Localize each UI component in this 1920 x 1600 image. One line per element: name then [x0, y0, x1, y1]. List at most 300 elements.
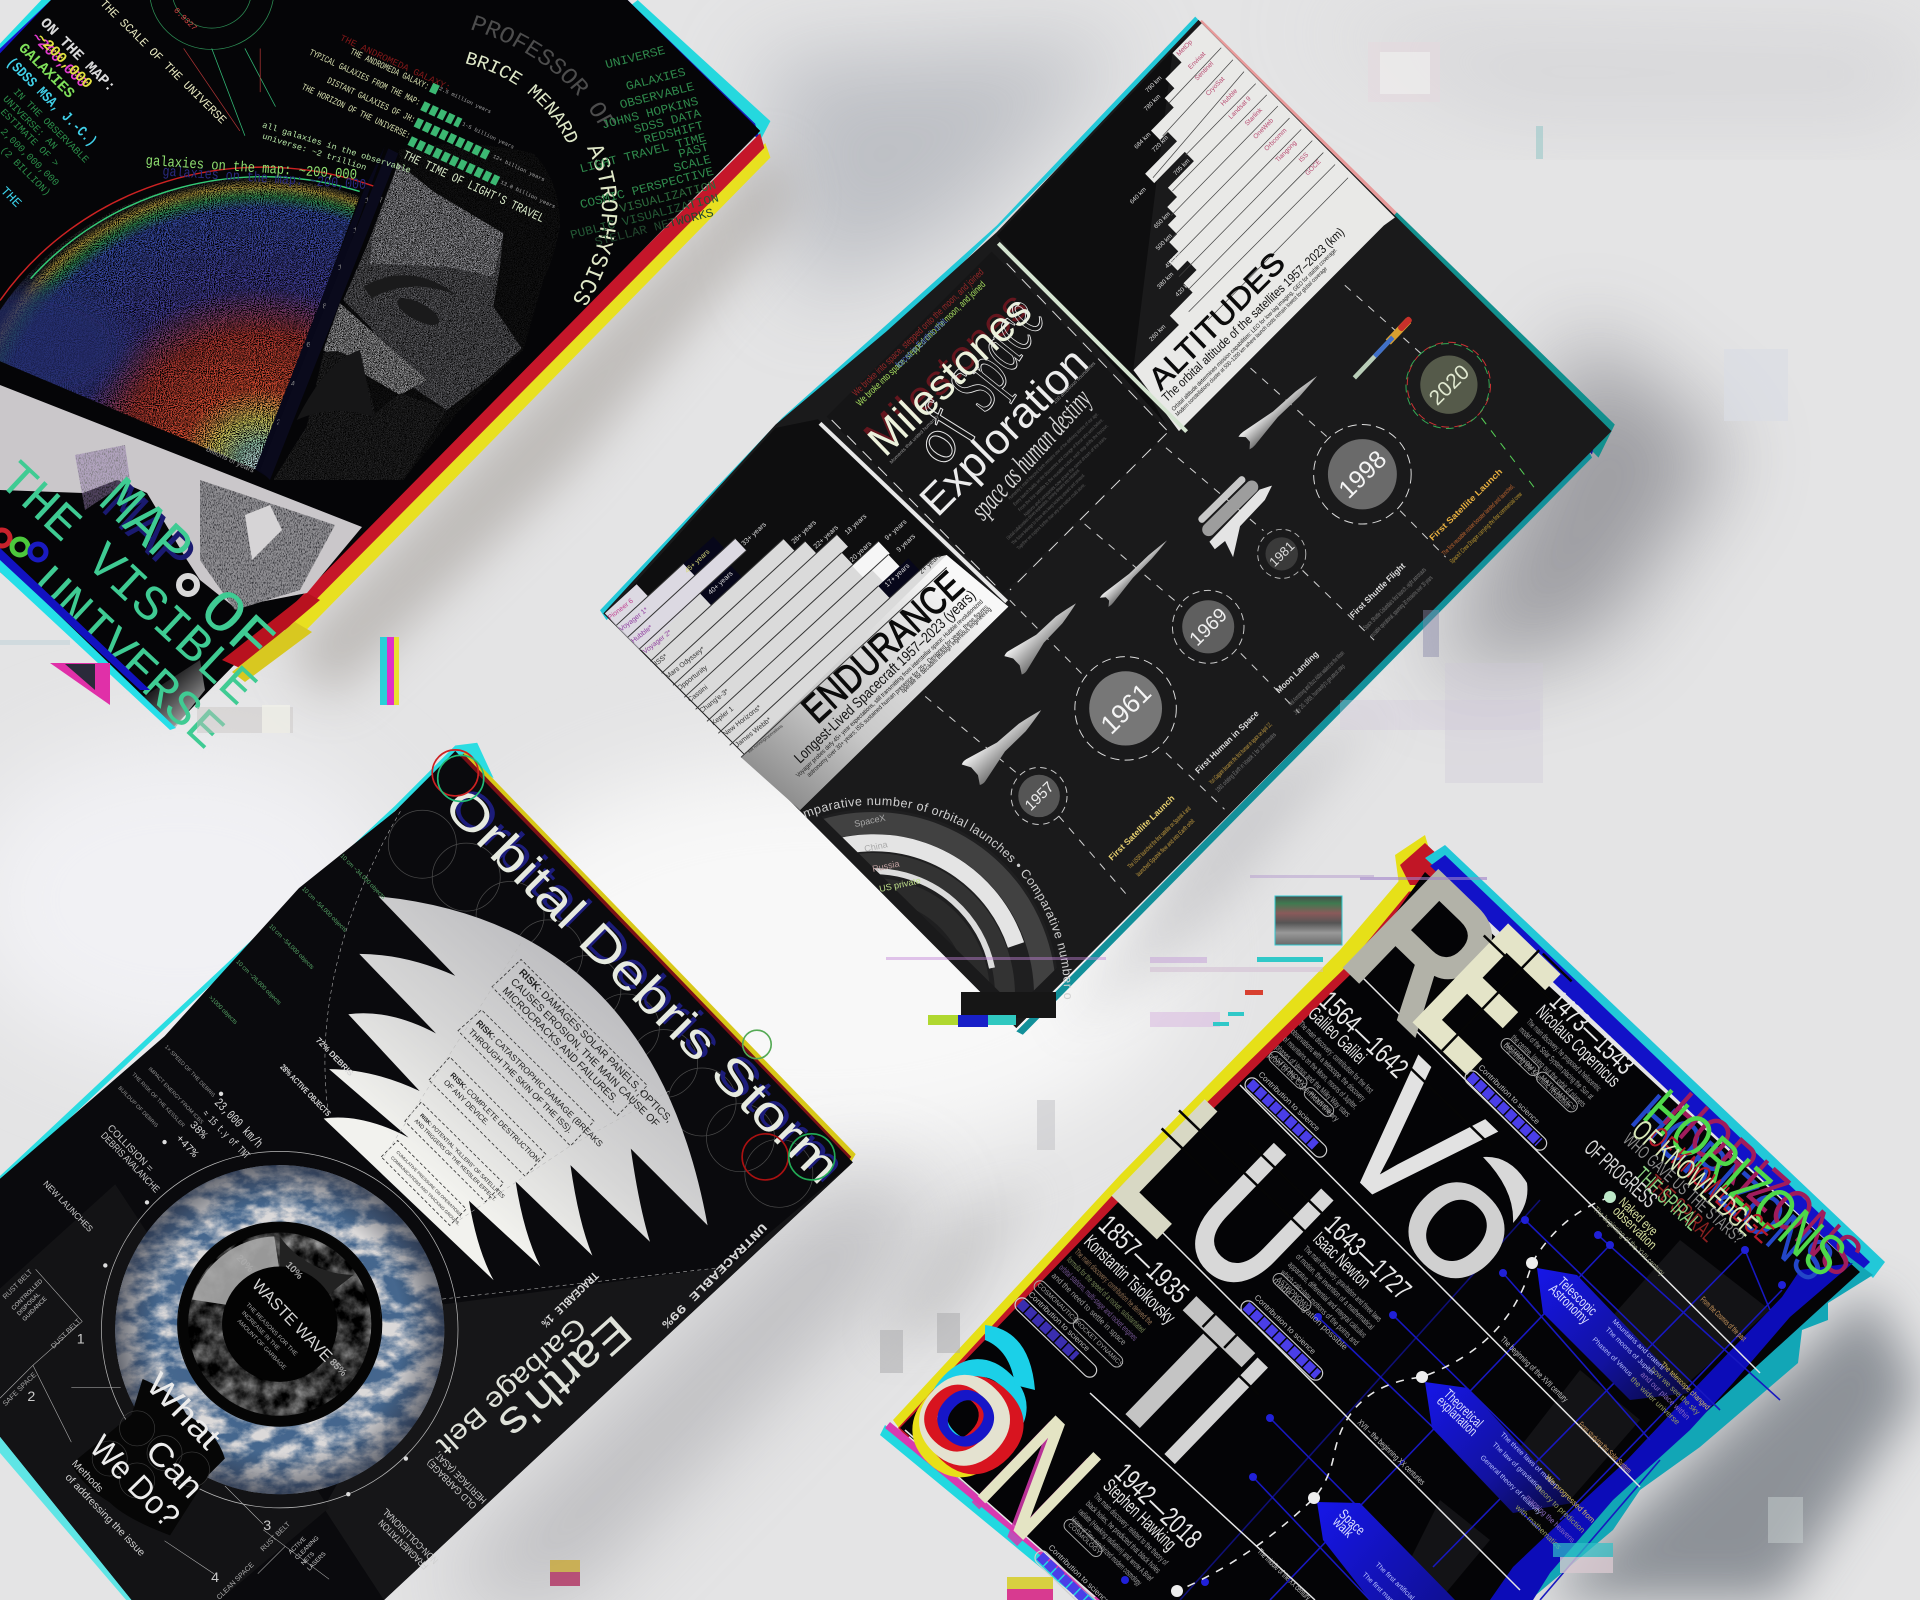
galileo bio: phases of Venus and the Milky Way stars — [1274, 1042, 1353, 1119]
milestones body: From the first satellite to the reusable rocket, each step shifts the horizon. — [1017, 423, 1110, 513]
naked eye observation: Naked eye — [1616, 1194, 1661, 1239]
galaxies on the map label: galaxies on the map: ~200,000 — [145, 154, 357, 184]
panel fill — [827, 252, 1168, 593]
strategy grid lines — [0, 1269, 329, 1579]
source labels: NON-COLLISIONAL — [380, 1505, 441, 1566]
blue stage labels — [1329, 1274, 1601, 1541]
copernicus bio: model of the Solar System placing the Sun at — [1517, 1025, 1596, 1101]
portrait: nose — [323, 303, 427, 395]
left data block: ~200,000 — [32, 31, 95, 92]
milestone bodies: launched Sputnik flew and into Earth orbit — [1135, 818, 1196, 878]
methods caption: Methods — [69, 1458, 105, 1495]
endurance year labels: 22+ years — [813, 524, 840, 550]
stage details: General theory of relativity — [1479, 1454, 1543, 1517]
title: the map of the visible universe: UNIVERSE — [19, 557, 233, 762]
waste wave percentages — [234, 1253, 349, 1379]
new launches heading: NEW LAUNCHES — [41, 1179, 95, 1234]
milestones intro — [850, 267, 988, 409]
milestones panel — [820, 243, 1187, 602]
dark label cells — [683, 537, 920, 605]
right keyword list: SCALE — [672, 153, 713, 176]
numbered strategies: 4 — [211, 1570, 219, 1586]
endurance row labels: Voyager 2* — [642, 629, 673, 656]
milestone captions: Moon Landing — [1274, 649, 1320, 695]
galaxy map: 2 — [277, 420, 281, 428]
endurance panel — [605, 513, 1008, 810]
bottom corner fade — [143, 660, 205, 728]
endurance row labels: Mars Odyssey* — [665, 646, 706, 681]
altitudes title: ALTITUDES — [1143, 246, 1292, 396]
strategy text: NETS — [300, 1551, 316, 1567]
endurance row labels: Kepler 1 — [710, 706, 735, 727]
debris share labels — [278, 1036, 355, 1118]
right keyword list: LIGHT TRAVEL TIME — [578, 131, 708, 176]
milestone captions — [1106, 466, 1504, 862]
milestones side notes: 100 ambitious boundaries — [1052, 360, 1097, 405]
poster body — [603, 20, 1612, 1028]
endurance year labels — [684, 513, 943, 596]
endurance row labels: Voyager 1* — [618, 606, 650, 633]
galaxies on the map label: galaxies on the map: ~200,000 — [162, 165, 367, 194]
light travel rows: TYPICAL GALAXIES FROM THE MAP: — [307, 47, 422, 108]
poster: Revolution / Horizons of Knowledge — [871, 831, 1885, 1600]
scale of the universe heading: THE SCALE OF THE UNIVERSE — [97, 0, 229, 127]
right side detail text: The telescope changed — [1659, 1360, 1712, 1412]
professor arc text: BRICE MENARD — [466, 52, 578, 142]
what can we do block: What — [139, 1365, 229, 1456]
glitch purple scratches — [75, 445, 130, 510]
risk box 5 — [381, 1140, 466, 1226]
poster body — [0, 751, 853, 1600]
source labels: FRAGMENTATION — [377, 1517, 431, 1571]
galaxy map: 4 — [291, 381, 296, 389]
milestones title: Exploration — [910, 338, 1098, 525]
source labels: OLD GARBAGE) — [425, 1456, 479, 1511]
strategy text: GUIDANCE — [22, 1296, 49, 1323]
right side detail text: mapping the heavens — [1524, 1493, 1577, 1545]
strategy text: CLEANING — [294, 1535, 321, 1561]
portrait: face — [343, 163, 522, 410]
risk box 2: RISK: CATASTROPHIC DAMAGE (BREAKS — [474, 1018, 605, 1149]
risk box 1: MICROCRACKS AND FAILURES. — [500, 986, 620, 1105]
strategy text: CONTROLLED — [11, 1278, 45, 1312]
galaxy map: 13.7 — [365, 198, 383, 206]
numbered strategies: 2 — [27, 1389, 35, 1405]
rainbow letter O: O — [871, 1338, 1052, 1519]
lower edge yellow chunk — [232, 622, 312, 682]
rocket 1998 — [1238, 369, 1323, 450]
bar years: 12+ billion years — [491, 153, 546, 183]
year 1957 — [1011, 767, 1067, 824]
giant letter U: U — [1146, 1110, 1366, 1332]
year 1998 — [1314, 425, 1411, 524]
tag labels: COSMOLOGY — [1066, 1522, 1102, 1557]
milestone bodies: The USSR launched the first satellite on Sputnik 4 and — [1127, 805, 1192, 870]
rainbow letter O: O — [881, 1337, 1047, 1505]
newton bio — [1271, 1243, 1384, 1356]
collision heading — [98, 1123, 162, 1196]
waste wave ring — [176, 1220, 384, 1428]
poster corner glitch — [50, 663, 110, 705]
naked eye observation — [1610, 1194, 1661, 1252]
milestones intro: We broke into space, stepped onto the moon, and joined — [850, 267, 986, 399]
endurance year labels: 45+ years — [684, 548, 712, 575]
endurance row labels: James Webb* — [734, 717, 773, 749]
title: the map of the visible universe: MAP — [84, 467, 204, 585]
rocket 1961 — [1004, 593, 1085, 675]
collision stats — [173, 1095, 266, 1162]
bar years — [438, 85, 557, 210]
galileo bio: of mountains on the Moon, moons of Jupiter, — [1281, 1034, 1360, 1111]
rocket 2020 — [1352, 316, 1413, 380]
milestone bodies: Yuri Gagarin became the first human in space on April 12, — [1208, 721, 1274, 786]
giant letter I: I — [1130, 1323, 1302, 1499]
timeline dots — [1171, 1191, 1616, 1597]
giant letter E: E — [1376, 887, 1596, 1110]
contribution labels — [1027, 1063, 1542, 1600]
collision stats: +47% — [173, 1133, 200, 1161]
chromatic edge offsets — [600, 17, 1615, 1035]
endurance year labels: 40+ years — [707, 570, 735, 596]
rocket 1969 — [1099, 535, 1172, 607]
tsiolkovsky bio: and the need to settle in space — [1050, 1270, 1129, 1347]
milestone bodies: SpaceX Crew Dragon carrying the first commercial crew — [1449, 491, 1524, 565]
light travel rows: DISTANT GALAXIES OF JH: — [325, 75, 417, 125]
title ring — [179, 576, 197, 594]
arc chart labels: Russia — [871, 858, 900, 874]
giant letter N: N — [943, 1391, 1125, 1576]
observable universe note: universe: ~2 trillion — [261, 132, 368, 173]
right side detail text: From the Cosmos of the past — [1699, 1295, 1748, 1343]
poster: Orbital Debris Storm — [0, 743, 856, 1600]
milestones body: Every launch builds on the discoveries and courage of those who went before. — [1012, 417, 1105, 507]
traceable labels: UNTRACEABLE 99% — [658, 1220, 769, 1331]
rust belt labels: DUST BELT — [50, 1317, 83, 1350]
contribution labels: Contribution to science — [1477, 1063, 1542, 1126]
year 2020 — [1406, 342, 1491, 428]
rainbow letter O: O — [887, 1318, 1068, 1499]
collision stats: 23,000 km/h — [211, 1095, 266, 1151]
endurance row labels: Opportunity — [676, 664, 709, 692]
orbit value: 0.9327 — [171, 7, 198, 33]
milestones side notes: Moments that united humanity — [889, 414, 941, 465]
portrait dates and names: Konstantin Tsiolkovsky — [1080, 1231, 1179, 1329]
observable universe note: all galaxies in the observable — [261, 121, 412, 175]
milestones intro: We broke into space, stepped onto the moon, and joined — [854, 279, 988, 409]
year 1969 — [1172, 590, 1244, 663]
giant letter L: L — [1076, 1063, 1282, 1272]
earth outer ring — [101, 1151, 458, 1508]
galaxy map — [0, 145, 385, 477]
chromatic edge offsets — [880, 835, 1885, 1600]
altitudes km labels: 640 km — [1129, 186, 1148, 206]
newton bio: which calculate motions of the points and — [1278, 1267, 1361, 1348]
horizons title: HORIZONS — [1619, 1082, 1847, 1295]
galileo bio: The main discovery: contribution for the first — [1297, 1019, 1376, 1096]
endurance row labels — [607, 598, 784, 756]
galileo bio: proof of the Copernican theory — [1266, 1050, 1342, 1124]
what can we do block: Can — [139, 1432, 211, 1505]
altitudes km labels: 500 km — [1155, 233, 1174, 252]
endurance year labels: 2+ years — [918, 552, 943, 576]
left data block: (SDSS MSA, J.-C.) — [2, 56, 99, 150]
contribution progress pills — [1012, 1068, 1550, 1600]
milestones body: Nations and companies now share the same dream of the stars. — [1023, 435, 1109, 518]
altitudes km labels: 380 km — [1156, 271, 1175, 291]
debris dome — [324, 896, 708, 1280]
title: the map of the visible universe: MAP — [87, 474, 207, 592]
time of light heading: THE TIME OF LIGHT'S TRAVEL — [400, 148, 547, 226]
title: the map of the visible universe: OF — [184, 577, 286, 679]
waste wave percentages: 20% — [234, 1253, 255, 1275]
professor arc text — [466, 15, 618, 305]
blue lower edge — [0, 548, 150, 690]
year 1957: 1957 — [1022, 779, 1057, 814]
altitudes satellite labels: GOCE — [1304, 158, 1323, 177]
of knowledge: OF KNOWLEDGE — [1625, 1114, 1763, 1243]
right side detail text: the wider universe — [1629, 1375, 1682, 1427]
endurance year labels: 20 years — [849, 540, 874, 564]
milestone captions: First Shuttle Flight — [1348, 561, 1407, 620]
grid nodes — [1121, 1216, 1786, 1586]
map dark strip over portrait edge — [260, 148, 398, 480]
collision stats: 38% — [186, 1119, 209, 1142]
milestones body: Global collaboration drives exploration, turning dreams into missions. — [1006, 468, 1082, 541]
portrait dates and names: 1942—2018 — [1109, 1457, 1208, 1554]
portrait dates and names: 1473—1543 — [1544, 985, 1641, 1080]
portrait: forehead — [370, 163, 503, 277]
portrait dates and names: Nicolaus Copernicus — [1532, 1001, 1624, 1092]
object count labels: 10 cm ~54,000 objects — [300, 886, 347, 934]
what can we do block — [71, 1365, 229, 1535]
year 1998: 1998 — [1333, 445, 1392, 504]
altitudes satellite labels — [1175, 39, 1323, 177]
newton bio: apparatus, differential and integral calculus — [1286, 1259, 1369, 1340]
portrait: hair and shoulders — [273, 144, 560, 480]
poster: Milestones of Space Exploration — [600, 17, 1615, 1035]
poster body — [0, 0, 760, 727]
chromatic rings on title — [432, 750, 835, 1180]
stat labels: 1× SPEED OF THE DEBRIS — [163, 1044, 216, 1099]
collision heading: COLLISION = — [105, 1123, 155, 1175]
galileo bio: observations with a telescope, the discovery — [1289, 1027, 1368, 1103]
waste wave center text: INCREASE IN THE — [240, 1310, 280, 1352]
year 1969: 1969 — [1185, 604, 1232, 651]
risk box 3 — [429, 1057, 546, 1176]
space shuttle — [1191, 465, 1288, 563]
object count labels — [207, 853, 386, 1026]
earth's garbage belt title: Earth's — [489, 1306, 642, 1450]
map left shade — [0, 286, 128, 402]
risk box 4: AND TRIGGERS OF THE KESSLER EFFECT. — [413, 1118, 498, 1203]
endurance year labels: 9+ years — [884, 518, 909, 542]
altitudes km labels: 450 km — [1164, 250, 1183, 270]
year 2020: 2020 — [1425, 360, 1474, 410]
rust belt labels — [1, 1268, 292, 1600]
altitudes satellite labels: Orbcomm — [1263, 127, 1289, 153]
left data block: GALAXIES — [14, 41, 77, 102]
endurance row labels: New Horizons* — [722, 704, 763, 738]
lower edge red chunk — [222, 593, 320, 668]
year 1961 — [1075, 657, 1176, 760]
milestones intro: forces in Earth's orbit. — [894, 315, 951, 370]
title dots — [0, 530, 46, 560]
right side detail text — [1513, 1295, 1748, 1551]
milestone captions: First Human in Space — [1193, 708, 1261, 776]
milestone bodies — [1127, 483, 1524, 878]
milestones body: Together we explore further than any one nation could alone. — [1016, 482, 1087, 551]
field tags — [1032, 1036, 1580, 1559]
stat labels — [116, 1044, 216, 1129]
soft dark columns — [1390, 1240, 1770, 1600]
pale top rows — [605, 539, 746, 650]
right side detail text: theory to prediction — [1534, 1483, 1587, 1535]
of knowledge: OF KNOWLEDGE — [1641, 1121, 1779, 1250]
debris share labels: 28% ACTIVE OBJECTS — [278, 1063, 333, 1118]
arc chart labels: US private — [878, 875, 922, 894]
stat labels: THE RISK OF THE KESSLER — [130, 1072, 186, 1129]
blue stage labels: Telescopic — [1555, 1274, 1601, 1319]
copernicus bio: beginning the scientific revolution — [1502, 1040, 1573, 1110]
script words: of — [896, 393, 983, 472]
who gave us the stars: WHO GAVE US THE STARS? — [1619, 1129, 1748, 1248]
the spiral of progress: OF PROGRESS — [1580, 1134, 1662, 1213]
arc chart caption — [805, 805, 1064, 1000]
scallops behind title — [388, 810, 813, 1207]
light travel rows: THE ANDROMEDA GALAXY: — [338, 33, 452, 93]
collision heading: DEBRIS AVALANCHE — [98, 1130, 162, 1196]
right keyword list: VISUALIZATION — [618, 179, 718, 216]
milestone bodies: reusable operational, spanning 30 missions over 30 years — [1369, 574, 1435, 640]
altitudes km labels: 705 km — [1172, 158, 1191, 177]
century captions — [1256, 1204, 1667, 1600]
endurance row labels: Pioneer 6 — [607, 598, 635, 622]
endurance row lines — [616, 535, 947, 757]
risk box 3: RISK: COMPLETE DESTRUCTION — [448, 1071, 541, 1164]
endurance body: operate for decades through ingenious engineering — [900, 606, 993, 695]
timeline dashed curve — [1177, 1197, 1610, 1591]
milestones title: Milestones — [859, 287, 1041, 466]
portrait: brow and eye — [363, 275, 457, 330]
risk box 5: COMMUNICATIONS AND TRACKING GROUPS. — [390, 1155, 461, 1226]
galileo bio — [1266, 1019, 1376, 1127]
endurance chart bars — [605, 535, 1008, 810]
right keyword list: PUBLIC VISUALIZATION — [569, 192, 720, 243]
portrait dates and names: Stephen Hawking — [1099, 1475, 1180, 1555]
tsiolkovsky bio: orbital stations, multi-stage and rocket engines — [1057, 1262, 1140, 1343]
panel frame lines — [820, 243, 1187, 602]
altitudes km labels: 684 km — [1133, 131, 1152, 151]
right keyword list: SDSS DATA — [632, 107, 703, 137]
bright chart cell two — [872, 555, 900, 582]
blue pentagon: space walk — [1317, 1502, 1455, 1600]
altitudes row lines — [1153, 48, 1348, 320]
giant letter O: O — [1369, 1142, 1545, 1319]
left data block — [0, 16, 118, 211]
left data block: IN THE OBSERVABLE — [11, 87, 91, 165]
right keyword list: GALAXIES — [624, 66, 687, 94]
chin highlight — [245, 505, 282, 560]
endurance title: ENDURANCE — [794, 563, 972, 732]
map axis strip — [255, 145, 385, 477]
copernicus bio — [1502, 1017, 1604, 1117]
rainbow letter O: O — [913, 1365, 1018, 1471]
waste wave center text: WASTE WAVE — [248, 1276, 336, 1365]
altitudes satellite labels: Hubble — [1220, 87, 1239, 108]
light travel bars — [410, 87, 498, 181]
debris share labels: 72% DEBRIS — [314, 1036, 355, 1078]
altitudes km labels: 720 km — [1151, 134, 1170, 154]
chromatic edge offsets — [0, 743, 856, 1600]
rocket 1957 — [961, 699, 1051, 786]
bar years: 1-5 billion years — [461, 121, 515, 151]
endurance year labels: 26+ years — [791, 519, 818, 545]
milestone captions: First Satellite Launch — [1106, 793, 1176, 862]
tag labels — [1036, 1041, 1578, 1557]
tsiolkovsky bio — [1050, 1247, 1155, 1351]
object count labels: 10 cm ~26,000 objects — [234, 959, 282, 1006]
of knowledge — [1625, 1114, 1779, 1250]
strategy text: LASERS — [307, 1551, 328, 1572]
blue stage labels: Space — [1336, 1506, 1369, 1538]
dome dashed guide lines — [325, 811, 730, 1299]
milestone bodies: Neil Armstrong and Buzz Aldrin walked on the Moon — [1287, 650, 1346, 708]
stage details — [1361, 1318, 1666, 1600]
cyan lower edge — [0, 558, 176, 730]
poster: Map of the Visible Universe — [0, 0, 770, 727]
waste wave center text: AMOUNT OF GARBAGE — [236, 1319, 287, 1371]
milestone bodies: July 20, 1969, humanity's greatest step — [1293, 663, 1347, 716]
milestone bodies: Space Shuttle Columbia's first launch, eight astronauts — [1362, 566, 1428, 632]
panel dashed lines — [832, 263, 1167, 590]
orbital debris title: Orbital Debris Storm — [439, 776, 856, 1193]
altitudes subtitle: The orbital altitude of the satellites 1957–2023 (km) — [1159, 225, 1347, 405]
the spiral of progress: THE SPIRAL — [1642, 1170, 1722, 1247]
newton bio: made navigation possible — [1271, 1275, 1350, 1352]
right side detail text: We progressed from — [1544, 1473, 1597, 1525]
risk box 3: OF ANY DEVICE. — [442, 1078, 491, 1127]
collision stats: ≈ 15 t.y of TNT — [199, 1109, 252, 1162]
source labels — [377, 1449, 489, 1571]
what can we do block: We Do? — [83, 1428, 187, 1534]
orbital launches arc chart — [824, 812, 1054, 992]
right keyword list: OBSERVABLE — [618, 80, 696, 112]
waste wave percentages: 10% — [283, 1260, 305, 1282]
year 1981 — [1258, 529, 1306, 578]
blue pentagon: telescopic astronomy — [1537, 1268, 1690, 1400]
portrait: moustache — [297, 350, 373, 420]
endurance body: Voyager probes defy 45+ year expectations, still transmitting from interstellar space; Hubble revolutionized — [795, 598, 985, 779]
rust belt labels: RUST BELT — [1, 1268, 35, 1301]
altitudes chart — [1133, 23, 1395, 431]
altitudes satellite labels: Landsat 9 — [1227, 95, 1253, 121]
white divider lines — [905, 968, 1760, 1600]
blue pentagon: theoretical explanation — [1425, 1382, 1573, 1513]
endurance row labels: Chang'e-3* — [699, 688, 730, 715]
tag labels: ASTRONOMY — [1272, 1054, 1307, 1088]
portrait dates and names: Galileo Galilei — [1304, 1003, 1370, 1069]
object count labels: >1000 objects — [207, 995, 238, 1026]
risk box 4: RISK: POTENTIAL "KILLERS" OF SATELLITES — [418, 1113, 506, 1200]
altitudes km labels — [1129, 75, 1193, 343]
traceable labels: TRACEABLE 1% — [538, 1268, 601, 1330]
milestones title: Milestones — [855, 283, 1037, 461]
copernicus bio: The main discovery: he proposed a heliocentric — [1525, 1017, 1604, 1094]
giant letter R: R — [1305, 831, 1543, 1071]
century captions: The beginning of the XVII century — [1592, 1204, 1667, 1278]
giant letter N: N — [949, 1385, 1131, 1570]
endurance year labels: 9 years — [896, 533, 917, 554]
